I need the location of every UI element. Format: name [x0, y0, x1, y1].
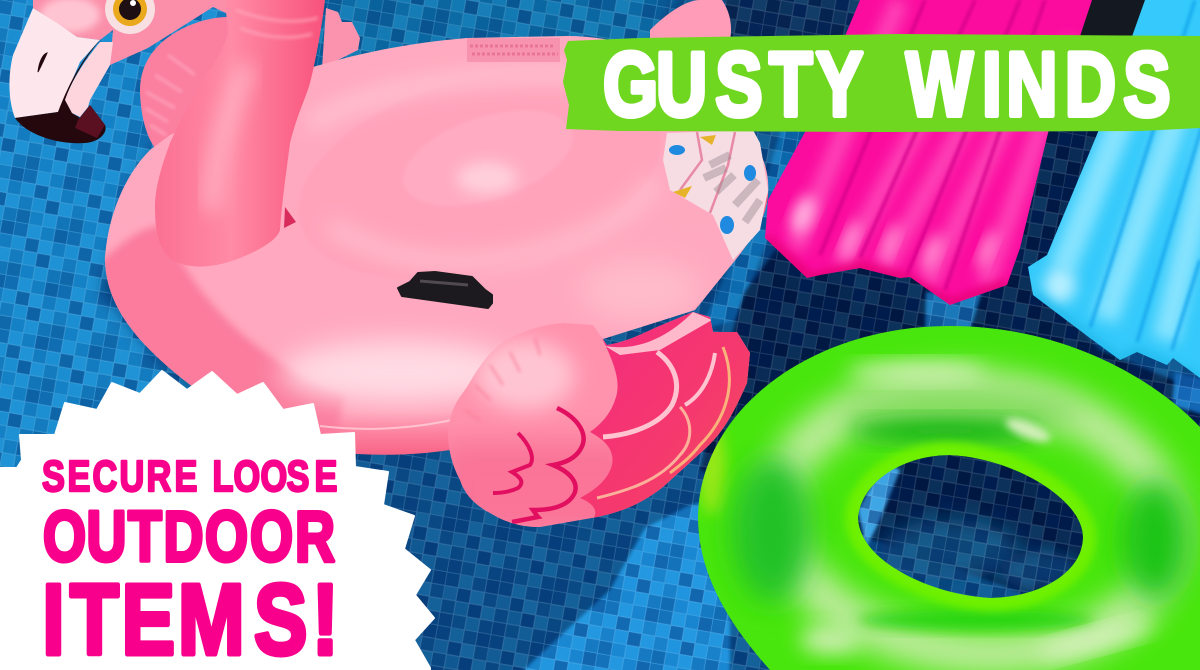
green swim ring [690, 320, 1200, 670]
black object top right [1070, 0, 1146, 45]
flamingo float [9, 0, 790, 535]
seat hole [284, 207, 296, 228]
back wing left [140, 17, 235, 148]
top far wing [650, 0, 731, 40]
callout line 1: SECURE LOOSE [42, 452, 337, 501]
body [105, 36, 768, 455]
safety labels [663, 130, 768, 260]
eye [105, 0, 155, 34]
beak [9, 8, 100, 118]
cyan air mattress [1020, 0, 1200, 390]
grab handle [398, 272, 492, 308]
title banner [563, 34, 1200, 136]
starburst callout [0, 371, 434, 670]
small print patch [470, 46, 558, 54]
tail [448, 312, 750, 527]
magenta air mattress [760, 0, 1100, 310]
title text: GUSTY WINDS [603, 34, 1171, 136]
back wing right [322, 8, 360, 68]
neck and head [9, 0, 325, 267]
callout line 2: OUTDOOR [43, 497, 335, 577]
